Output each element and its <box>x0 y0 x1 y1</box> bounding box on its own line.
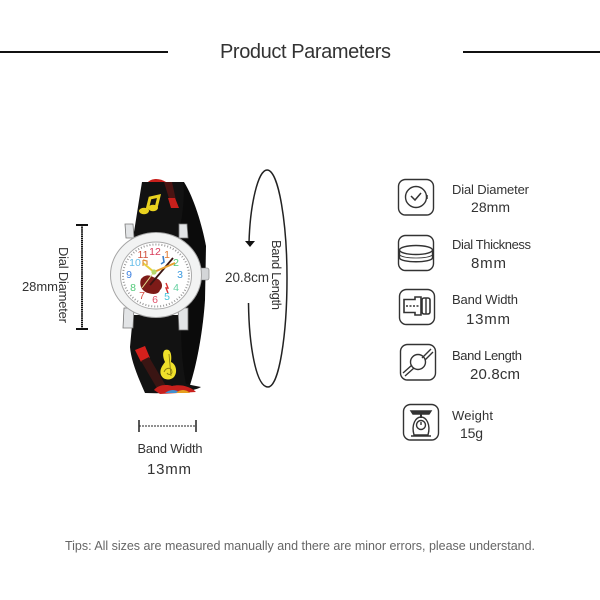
parameter: band width: Band Width <box>452 292 518 307</box>
dial numerals: 9 <box>126 269 132 281</box>
band width dimension: Band Width <box>138 441 202 456</box>
icon: yellow treble clef <box>160 350 176 379</box>
parameter: weight <box>452 408 493 441</box>
parameter: band length <box>452 348 522 383</box>
upper front strap <box>133 182 184 238</box>
parameter: band width: 13mm <box>466 311 510 328</box>
dial numerals: 2 <box>173 257 179 269</box>
dial numerals: 5 <box>164 291 170 303</box>
dial numerals: 11 <box>138 249 149 261</box>
dial numerals: 8 <box>130 282 136 294</box>
icon: dial thickness <box>398 236 434 270</box>
icon: weight scale <box>404 404 438 440</box>
watch lugs <box>125 224 134 238</box>
band length dimension <box>225 170 287 387</box>
icon: red guitar on strap <box>135 346 196 394</box>
dial diameter dimension: Dial Diameter <box>56 247 71 324</box>
parameter: weight: Weight <box>452 408 493 423</box>
band width dimension: 13mm <box>147 461 191 478</box>
icon: dial diameter <box>398 180 434 215</box>
dial diameter dimension: 28mm <box>22 279 58 294</box>
parameter: dial thickness: Dial Thickness <box>452 237 532 252</box>
parameter: dial diameter: 28mm <box>471 199 510 215</box>
dial numerals <box>126 246 183 306</box>
bezel <box>110 232 202 318</box>
crown <box>200 268 209 280</box>
parameter: dial diameter: Dial Diameter <box>452 182 530 197</box>
dial numerals: 4 <box>173 282 179 294</box>
watch illustration <box>110 179 209 394</box>
dial numerals: 1 <box>164 249 170 261</box>
parameter: band length: Band Length <box>452 348 522 363</box>
lower front strap <box>130 315 201 393</box>
parameter: band length: 20.8cm <box>470 366 520 383</box>
parameter: band width <box>452 292 518 328</box>
icon: band length <box>400 344 436 380</box>
dial numerals: 6 <box>152 294 158 306</box>
band length dimension: 20.8cm <box>225 270 269 285</box>
back strap <box>178 182 206 388</box>
parameter: dial diameter <box>452 182 530 215</box>
icon: yellow music note <box>139 196 159 214</box>
dial diameter dimension <box>22 225 88 329</box>
parameter: dial thickness: 8mm <box>471 255 506 272</box>
dial face <box>123 244 189 306</box>
parameter: weight: 15g <box>460 425 483 441</box>
band length dimension: Band Length <box>269 240 284 310</box>
dial numerals: 10 <box>129 257 141 269</box>
parameter: dial thickness <box>452 237 532 272</box>
strap red stripes <box>148 179 166 182</box>
title with side rules: Product Parameters <box>220 41 391 63</box>
dial numerals: 7 <box>139 290 145 302</box>
dial numerals: 3 <box>177 269 183 281</box>
dial guitar and hands <box>140 256 175 294</box>
dial numerals: 12 <box>149 246 161 258</box>
band width dimension <box>138 420 202 478</box>
tips note: Tips: All sizes are measured manually and there are minor errors, please understand. <box>65 539 535 553</box>
icon: band width <box>400 290 434 324</box>
